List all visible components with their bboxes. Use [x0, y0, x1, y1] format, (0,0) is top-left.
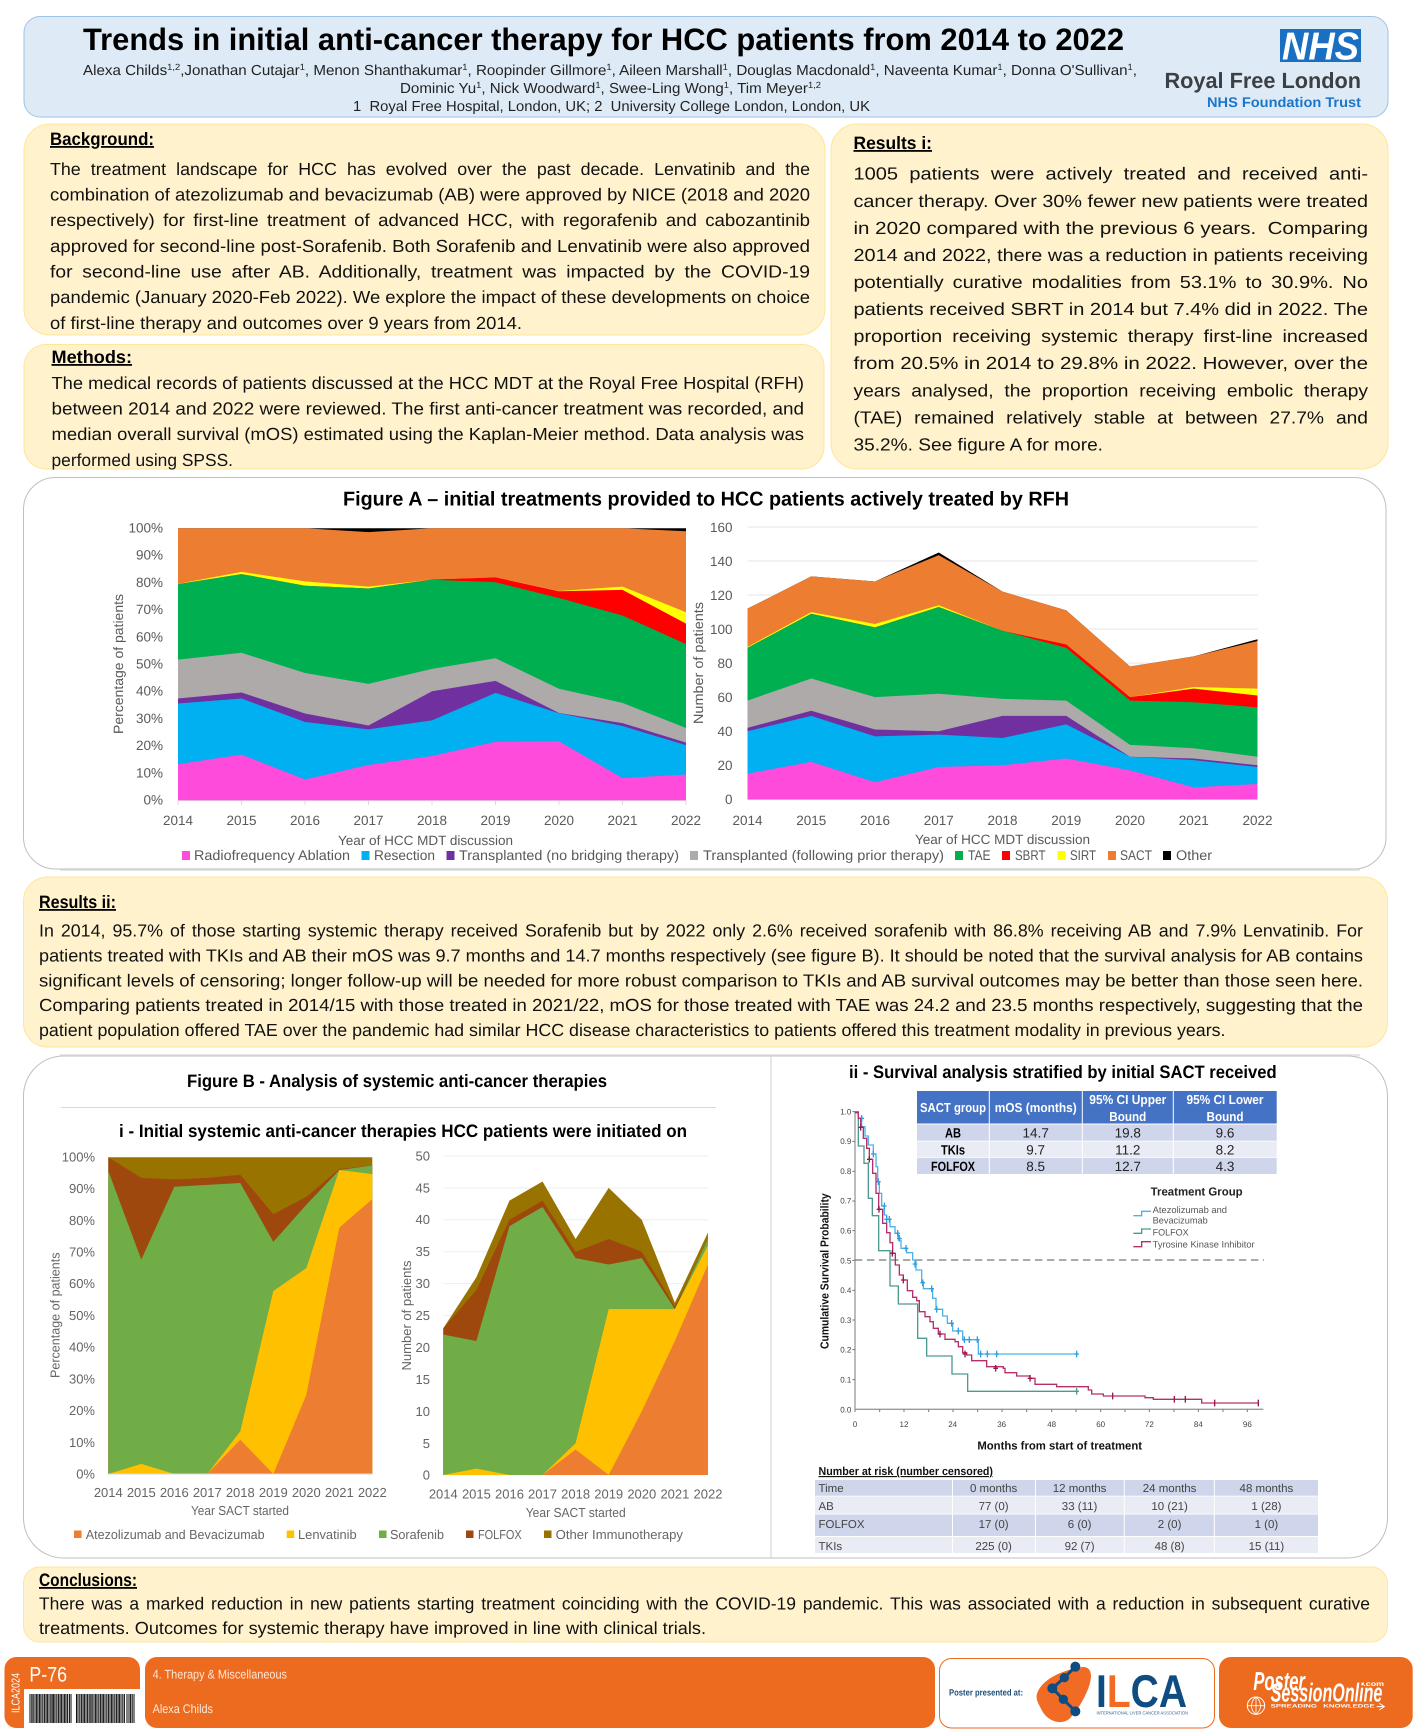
chart: SACT percentage area chart: 40%	[69, 1340, 95, 1354]
KM axis labels: 36	[997, 1420, 1006, 1429]
chart: percentage area chart: 2021	[607, 813, 638, 828]
chart: patient number area chart: 2020	[1115, 813, 1145, 828]
KM legend: Treatment Group	[1151, 1185, 1243, 1198]
background text	[50, 159, 810, 333]
results i text: (TAE) remained relatively stable at between 27.7% and	[854, 408, 1368, 428]
authors	[83, 62, 1137, 115]
chart: patient number area chart: 2022	[1242, 813, 1273, 828]
chart: SACT percentage area chart: 2015	[127, 1485, 156, 1500]
organisation subtitle: NHS Foundation Trust	[1207, 94, 1361, 110]
table: median overall survival: 95% CI Lower	[1186, 1092, 1264, 1107]
chart: SACT percentage area chart: 50%	[69, 1308, 95, 1323]
results ii text	[39, 920, 1363, 1040]
chart: patient number area chart: 40	[717, 724, 732, 739]
chart: percentage area chart: 40%	[136, 684, 163, 698]
KM axis labels: 24	[948, 1420, 957, 1429]
table: number at risk: FOLFOX	[818, 1519, 865, 1531]
table: median overall survival: 11.2	[1115, 1142, 1140, 1158]
results ii text: In 2014, 95.7% of those starting systemic therapy received Sorafenib but by 2022 only 2.6% received sorafenib with 86.8% receiving AB and 7.9% Lenvatinib. For	[39, 920, 1363, 940]
legend: figure B: Sorafenib	[390, 1527, 444, 1542]
KM axis labels: 0.2	[840, 1346, 851, 1355]
table: number at risk: Number at risk (number censored)	[818, 1466, 993, 1478]
table: median overall survival: 19.8	[1115, 1126, 1141, 1140]
panel: background	[24, 124, 825, 335]
chart: percentage area chart: 2016	[290, 813, 320, 828]
KM axis labels: 72	[1145, 1420, 1154, 1429]
table: median overall survival: FOLFOX	[931, 1159, 975, 1174]
KM axis labels: 0.7	[840, 1197, 851, 1206]
chart: patient number area chart: 2015	[796, 813, 826, 828]
chart: percentage area chart: 0%	[143, 792, 163, 808]
chart: SACT patient number area chart: 15	[416, 1372, 430, 1387]
chart: SACT percentage area chart: 2017	[193, 1485, 222, 1500]
chart: SACT patient number area chart: 2015	[462, 1486, 491, 1502]
KM axis labels: 0.8	[840, 1167, 851, 1176]
legend: figure A: SACT	[1120, 847, 1152, 863]
chart: percentage area chart: 20%	[136, 738, 163, 753]
chart: percentage area chart: 2015	[226, 813, 257, 828]
background text: The treatment landscape for HCC has evolved over the past decade. Lenvatinib and the	[50, 159, 810, 179]
KM axis labels: 96	[1243, 1420, 1252, 1429]
table: median overall survival: 9.6	[1216, 1126, 1234, 1140]
authors: 1 Royal Free Hospital, London, UK; 2 University College London, London, UK	[353, 99, 870, 115]
chart: SACT patient number area chart: Year SACT started	[526, 1505, 626, 1520]
KM axis labels: 48	[1047, 1420, 1056, 1429]
results ii text: patient population offered TAE over the pandemic had similar HCC disease characteristics to patients offered this treatment modality in previous years.	[39, 1020, 1226, 1040]
chart: SACT patient number area chart: 2016	[495, 1486, 524, 1502]
legend: figure A: Other	[1176, 847, 1212, 863]
table: median overall survival: 14.7	[1023, 1126, 1049, 1140]
KM axis labels: 0	[853, 1420, 857, 1429]
chart: SACT patient number area chart: 20	[416, 1340, 430, 1355]
KM axis labels: 84	[1194, 1420, 1203, 1429]
chart: percentage area chart: 10%	[136, 766, 163, 780]
KM axis labels: 0.3	[840, 1316, 851, 1325]
chart: percentage area chart: 50%	[136, 656, 163, 672]
chart: SACT patient number area chart: 2020	[627, 1486, 656, 1502]
table: number at risk: Time	[818, 1483, 844, 1495]
table: median overall survival: 8.2	[1216, 1142, 1234, 1158]
chart: SACT patient number area chart: 2017	[528, 1486, 557, 1502]
results i text: years analysed, the proportion receiving embolic therapy	[854, 380, 1368, 400]
chart: SACT percentage area chart: 80%	[69, 1213, 95, 1228]
methods text: median overall survival (mOS) estimated using the Kaplan-Meier method. Data analysis was	[52, 424, 804, 444]
heading: results ii: Results ii:	[39, 892, 116, 912]
legend: figure B: Lenvatinib	[298, 1527, 357, 1542]
figure B part i heading: i - Initial systemic anti-cancer therapies HCC patients were initiated on	[119, 1121, 687, 1141]
figure A title: Figure A – initial treatments provided to HCC patients actively treated by RFH	[343, 488, 1069, 510]
figure B title: Figure B - Analysis of systemic anti-cancer therapies	[187, 1071, 607, 1091]
KM axis labels: 0.1	[840, 1376, 851, 1385]
chart: percentage area chart: 2019	[480, 813, 511, 828]
table: median overall survival: mOS (months)	[995, 1100, 1077, 1115]
chart: SACT patient number area chart: 45	[416, 1180, 430, 1196]
legend: figure B: Atezolizumab and Bevacizumab	[86, 1527, 265, 1542]
title: Trends in initial anti-cancer therapy for HCC patients from 2014 to 2022	[83, 22, 1124, 57]
chart: SACT percentage area chart: 2016	[160, 1485, 189, 1500]
KM axis labels: 1.0	[840, 1107, 851, 1116]
table: median overall survival: SACT group	[920, 1100, 986, 1115]
chart: patient number area chart: Year of HCC MDT discussion	[915, 832, 1090, 847]
KM legend: Bevacizumab	[1153, 1215, 1208, 1225]
chart: SACT percentage area chart	[48, 1150, 387, 1518]
table: number at risk: 1 (0)	[1255, 1519, 1278, 1531]
chart: SACT percentage area chart: 10%	[69, 1435, 95, 1450]
table: median overall survival: 95% CI Upper	[1089, 1092, 1166, 1107]
results i text: potentially curative modalities from 53.1% to 30.9%. No	[854, 272, 1368, 292]
heading: results i: Results i:	[854, 133, 932, 153]
chart: SACT patient number area chart: 25	[416, 1308, 430, 1323]
footer: category and author box: 4. Therapy & Miscellaneous	[153, 1668, 287, 1682]
authors: Alexa Childs 1,2,Jonathan Cutajar 1, Menon Shanthakumar 1, Roopinder Gillmore 1, Aileen Marshall 1, Douglas Macdonald 1, Naveenta Kumar 1, Donna O'Sullivan 1,	[83, 62, 1137, 79]
chart: SACT percentage area chart: 2020	[292, 1485, 321, 1500]
results ii text: patients treated with TKIs and AB their mOS was 9.7 months and 14.7 months respectively (see figure B). It should be noted that the survival analysis for AB contains	[39, 946, 1363, 966]
chart: SACT percentage area chart: 2019	[259, 1485, 288, 1500]
chart: patient number area chart: 2017	[924, 813, 954, 828]
chart: SACT patient number area chart	[399, 1148, 722, 1520]
table: number at risk: 15 (11)	[1249, 1541, 1284, 1553]
methods text	[52, 373, 804, 470]
chart: SACT percentage area chart: 90%	[69, 1181, 95, 1196]
KM axis labels: Months from start of treatment	[977, 1439, 1142, 1452]
table: number at risk: 2 (0)	[1158, 1519, 1182, 1531]
chart: percentage area chart: Year of HCC MDT discussion	[338, 833, 513, 848]
chart: patient number area chart: Number of patients	[691, 602, 706, 724]
chart: patient number area chart: 2014	[732, 813, 763, 828]
chart: SACT patient number area chart: 35	[416, 1244, 430, 1259]
KM axis labels: 0.4	[840, 1286, 851, 1295]
table: number at risk: 92 (7)	[1065, 1541, 1095, 1553]
chart: patient number area chart: 100	[710, 622, 732, 637]
results i text: cancer therapy. Over 30% fewer new patients were treated	[854, 191, 1368, 211]
table: median overall survival: Bound	[1109, 1109, 1146, 1124]
chart: percentage area chart: 2020	[544, 813, 574, 828]
legend: figure A: Transplanted (no bridging therapy)	[459, 847, 679, 863]
legend: figure A: SBRT	[1015, 847, 1046, 863]
KM legend: Tyrosine Kinase Inhibitor	[1153, 1239, 1255, 1250]
table: number at risk: 33 (11)	[1062, 1501, 1098, 1513]
footer: PosterSessionOnline logo box: Poster	[1253, 1666, 1306, 1696]
table: median overall survival: TKIs	[941, 1142, 965, 1158]
table: number at risk: 17 (0)	[979, 1519, 1009, 1531]
header panel	[24, 16, 1388, 117]
background text: approved for second-line post-Sorafenib. Both Sorafenib and Lenvatinib were also approved	[50, 236, 810, 256]
table: median overall survival: AB	[945, 1126, 961, 1140]
chart: SACT patient number area chart: 2018	[561, 1486, 590, 1502]
chart: SACT percentage area chart: 20%	[69, 1403, 95, 1418]
KM legend: FOLFOX	[1153, 1227, 1189, 1237]
chart: percentage area chart: 100%	[128, 520, 163, 536]
KM axis labels: Cumulative Survival Probability	[818, 1193, 831, 1349]
chart: patient number area chart: 160	[710, 520, 732, 535]
chart: SACT patient number area chart: 2021	[660, 1486, 689, 1502]
footer: PosterSessionOnline logo box	[1219, 1657, 1413, 1728]
table: number at risk: 225 (0)	[975, 1541, 1012, 1553]
footer: ILCA logo box: Poster presented at:	[949, 1688, 1023, 1698]
KM legend	[1133, 1185, 1255, 1250]
chart: patient number area chart: 2018	[987, 813, 1018, 828]
background text: combination of atezolizumab and bevacizumab (AB) were approved by NICE (2018 and 2020	[50, 184, 810, 204]
heading: conclusions: Conclusions:	[39, 1570, 137, 1590]
footer: poster number box	[4, 1657, 140, 1728]
background text: for second-line use after AB. Additionally, treatment was impacted by the COVID-19	[50, 262, 810, 282]
conclusions text: treatments. Outcomes for systemic therapy have improved in line with clinical trials.	[39, 1618, 706, 1638]
curve: AB	[855, 1112, 1079, 1357]
footer: category and author box: Alexa Childs	[153, 1702, 213, 1716]
chart: SACT percentage area chart: Year SACT started	[191, 1503, 289, 1518]
chart: patient number area chart: 120	[710, 588, 732, 603]
table: number at risk: 0 months	[970, 1483, 1017, 1495]
chart: SACT percentage area chart: 30%	[69, 1372, 95, 1386]
chart: SACT percentage area chart: 2022	[358, 1485, 387, 1500]
table: number at risk: 6 (0)	[1068, 1519, 1092, 1531]
chart: patient number area chart: 2016	[860, 813, 890, 828]
results i text: from 20.5% in 2014 to 29.8% in 2022. However, over the	[854, 353, 1368, 373]
table: number at risk: 12 months	[1053, 1483, 1107, 1495]
table: number at risk: 48 (8)	[1155, 1541, 1185, 1553]
chart: SACT percentage area chart: Percentage of patients	[48, 1252, 62, 1378]
methods text: between 2014 and 2022 were reviewed. The first anti-cancer treatment was recorded, and	[52, 398, 804, 418]
chart: percentage area chart: 60%	[136, 630, 163, 644]
table: number at risk: 1 (28)	[1251, 1501, 1282, 1513]
organisation name: Royal Free London	[1164, 68, 1361, 93]
chart: SACT percentage area chart: 2018	[226, 1485, 255, 1500]
table: number at risk: 77 (0)	[979, 1501, 1009, 1513]
background text: of first-line therapy and outcomes over 9 years from 2014.	[50, 313, 522, 333]
methods text: The medical records of patients discussed at the HCC MDT at the Royal Free Hospital (RFH)	[52, 373, 804, 393]
chart: percentage area chart: 90%	[136, 548, 163, 562]
KM axis labels	[818, 1107, 1252, 1452]
chart: SACT percentage area chart: 0%	[76, 1466, 95, 1482]
KM axis labels: 12	[900, 1420, 908, 1429]
background text: pandemic (January 2020-Feb 2022). We explore the impact of these developments on choice	[50, 287, 810, 307]
results ii text: significant levels of censoring; longer follow-up will be needed for more robust comparison to TKIs and AB survival outcomes may be better than those seen here.	[39, 970, 1363, 990]
chart: SACT patient number area chart: 2022	[694, 1486, 722, 1502]
legend: figure A: Resection	[374, 847, 435, 863]
KM axis labels: 0.5	[840, 1256, 851, 1265]
chart: SACT patient number area chart: 10	[416, 1404, 430, 1419]
KM axis labels: 0.0	[840, 1405, 851, 1414]
results ii text: Comparing patients treated in 2014/15 with those treated in 2021/22, mOS for those treated with TAE was 24.2 and 23.5 months respectively, suggesting that the	[39, 995, 1363, 1015]
chart: percentage area chart: 2014	[163, 813, 194, 828]
chart: SACT patient number area chart: 50	[416, 1148, 430, 1164]
chart: SACT percentage area chart: 70%	[69, 1244, 95, 1260]
chart: percentage area chart: 80%	[136, 575, 163, 590]
conclusions text	[39, 1594, 1370, 1638]
methods text: performed using SPSS.	[52, 450, 233, 470]
legend: figure B: FOLFOX	[478, 1527, 522, 1542]
legend: figure A: TAE	[968, 847, 990, 863]
table: median overall survival	[917, 1091, 1277, 1174]
results i text: 1005 patients were actively treated and received anti-	[854, 164, 1368, 184]
table: number at risk	[815, 1466, 1318, 1553]
table: number at risk: TKIs	[818, 1541, 842, 1553]
footer: PosterSessionOnline logo box: .com	[1363, 1680, 1384, 1688]
legend: figure A: SIRT	[1070, 847, 1096, 863]
chart: patient number area chart	[691, 520, 1273, 847]
icon: NHS logo: NHS	[1282, 26, 1359, 68]
chart: patient number area chart: 80	[717, 656, 732, 671]
chart: SACT percentage area chart: 100%	[62, 1150, 95, 1164]
footer: PosterSessionOnline logo box: SPREADING KNOWLEDGE	[1271, 1703, 1375, 1709]
poster number: P-76	[29, 1664, 67, 1686]
barcode	[30, 1694, 134, 1723]
chart: patient number area chart: 20	[717, 758, 732, 773]
results i text: proportion receiving systemic therapy first-line increased	[854, 326, 1368, 346]
chart: percentage area chart: 2022	[671, 813, 701, 828]
table: number at risk: 10 (21)	[1151, 1501, 1188, 1513]
legend: figure B: Other Immunotherapy	[556, 1527, 683, 1542]
panel: figure B	[24, 1054, 1388, 1558]
results i text: patients received SBRT in 2014 but 7.4% did in 2022. The	[854, 299, 1368, 319]
table: number at risk: 24 months	[1143, 1483, 1197, 1495]
legend: figure A: Transplanted (following prior therapy)	[703, 847, 944, 863]
results i text	[854, 164, 1368, 454]
chart: SACT percentage area chart: 60%	[69, 1276, 95, 1291]
table: number at risk: AB	[818, 1501, 834, 1513]
panel: methods	[24, 344, 824, 470]
KM axis labels: 60	[1096, 1420, 1105, 1429]
legend: figure A: Radiofrequency Ablation	[194, 847, 350, 863]
chart: percentage area chart	[111, 520, 701, 848]
table: median overall survival: 12.7	[1115, 1159, 1141, 1174]
ILCA wordmark: ILCA	[1096, 1665, 1187, 1717]
results i text: in 2020 compared with the previous 6 years. Comparing	[854, 218, 1368, 238]
KM axis labels: 0.9	[840, 1137, 851, 1146]
panel: conclusions	[24, 1567, 1388, 1642]
results i text: 35.2%. See figure A for more.	[854, 434, 1103, 454]
chart: SACT patient number area chart: 2014	[429, 1486, 458, 1502]
legend: figure A	[182, 847, 1212, 863]
footer: category and author box	[145, 1657, 935, 1728]
footer: ILCA logo box: INTERNATIONAL LIVER CANCER ASSOCIATION	[1096, 1710, 1188, 1716]
panel: results i	[831, 124, 1388, 469]
authors: Dominic Yu 1, Nick Woodward 1, Swee-Ling Wong 1, Tim Meyer 1,2	[400, 80, 821, 97]
footer: ILCA logo box	[940, 1658, 1214, 1728]
chart: SACT patient number area chart: 2019	[594, 1486, 623, 1502]
table: median overall survival: Bound	[1206, 1109, 1244, 1124]
chart: percentage area chart: Percentage of patients	[111, 594, 126, 734]
KM legend: Atezolizumab and	[1153, 1205, 1227, 1215]
chart: percentage area chart: 2018	[417, 813, 447, 828]
curve: FOLFOX	[855, 1112, 1079, 1395]
figure B part ii heading: ii - Survival analysis stratified by initial SACT received	[849, 1062, 1277, 1082]
conference code: ILCA2024	[10, 1673, 22, 1713]
KM axis labels: 0.6	[840, 1226, 851, 1235]
table: number at risk: 48 months	[1240, 1483, 1293, 1495]
chart: SACT patient number area chart: 5	[423, 1436, 430, 1451]
table: median overall survival: 9.7	[1026, 1142, 1045, 1158]
conclusions text: There was a marked reduction in new patients starting treatment coinciding with the COVID-19 pandemic. This was associated with a reduction in subsequent curative	[39, 1594, 1370, 1614]
chart: SACT percentage area chart: 2014	[94, 1485, 123, 1500]
chart: SACT percentage area chart: 2021	[325, 1485, 354, 1500]
icon: ILCA logo mark	[1037, 1662, 1091, 1722]
legend: figure B	[74, 1527, 683, 1542]
table: median overall survival: 4.3	[1216, 1159, 1234, 1174]
chart: patient number area chart: 2021	[1179, 813, 1209, 828]
table: median overall survival: 8.5	[1026, 1159, 1045, 1174]
chart: Kaplan-Meier survival curves	[818, 1107, 1264, 1452]
chart: SACT patient number area chart: Number of patients	[399, 1260, 414, 1370]
chart: SACT patient number area chart: 30	[416, 1276, 430, 1291]
chart: SACT patient number area chart: 40	[416, 1212, 430, 1227]
curve: TKI	[855, 1113, 1258, 1406]
panel: figure A	[24, 478, 1386, 871]
chart: percentage area chart: 30%	[136, 711, 163, 726]
chart: patient number area chart: 140	[710, 554, 732, 569]
heading: background: Background:	[50, 129, 154, 149]
chart: SACT patient number area chart: 0	[423, 1468, 430, 1482]
chart: patient number area chart: 0	[725, 792, 732, 807]
background text: respectively) for first-line treatment of advanced HCC, with regorafenib and cabozantinib	[50, 210, 810, 230]
panel: results ii	[24, 877, 1388, 1047]
chart: patient number area chart: 2019	[1051, 813, 1081, 828]
chart: percentage area chart: 2017	[353, 813, 384, 828]
heading: methods: Methods:	[52, 347, 132, 367]
results i text: 2014 and 2022, there was a reduction in patients receiving	[854, 245, 1368, 265]
chart: percentage area chart: 70%	[136, 602, 163, 617]
chart: patient number area chart: 60	[717, 690, 732, 705]
